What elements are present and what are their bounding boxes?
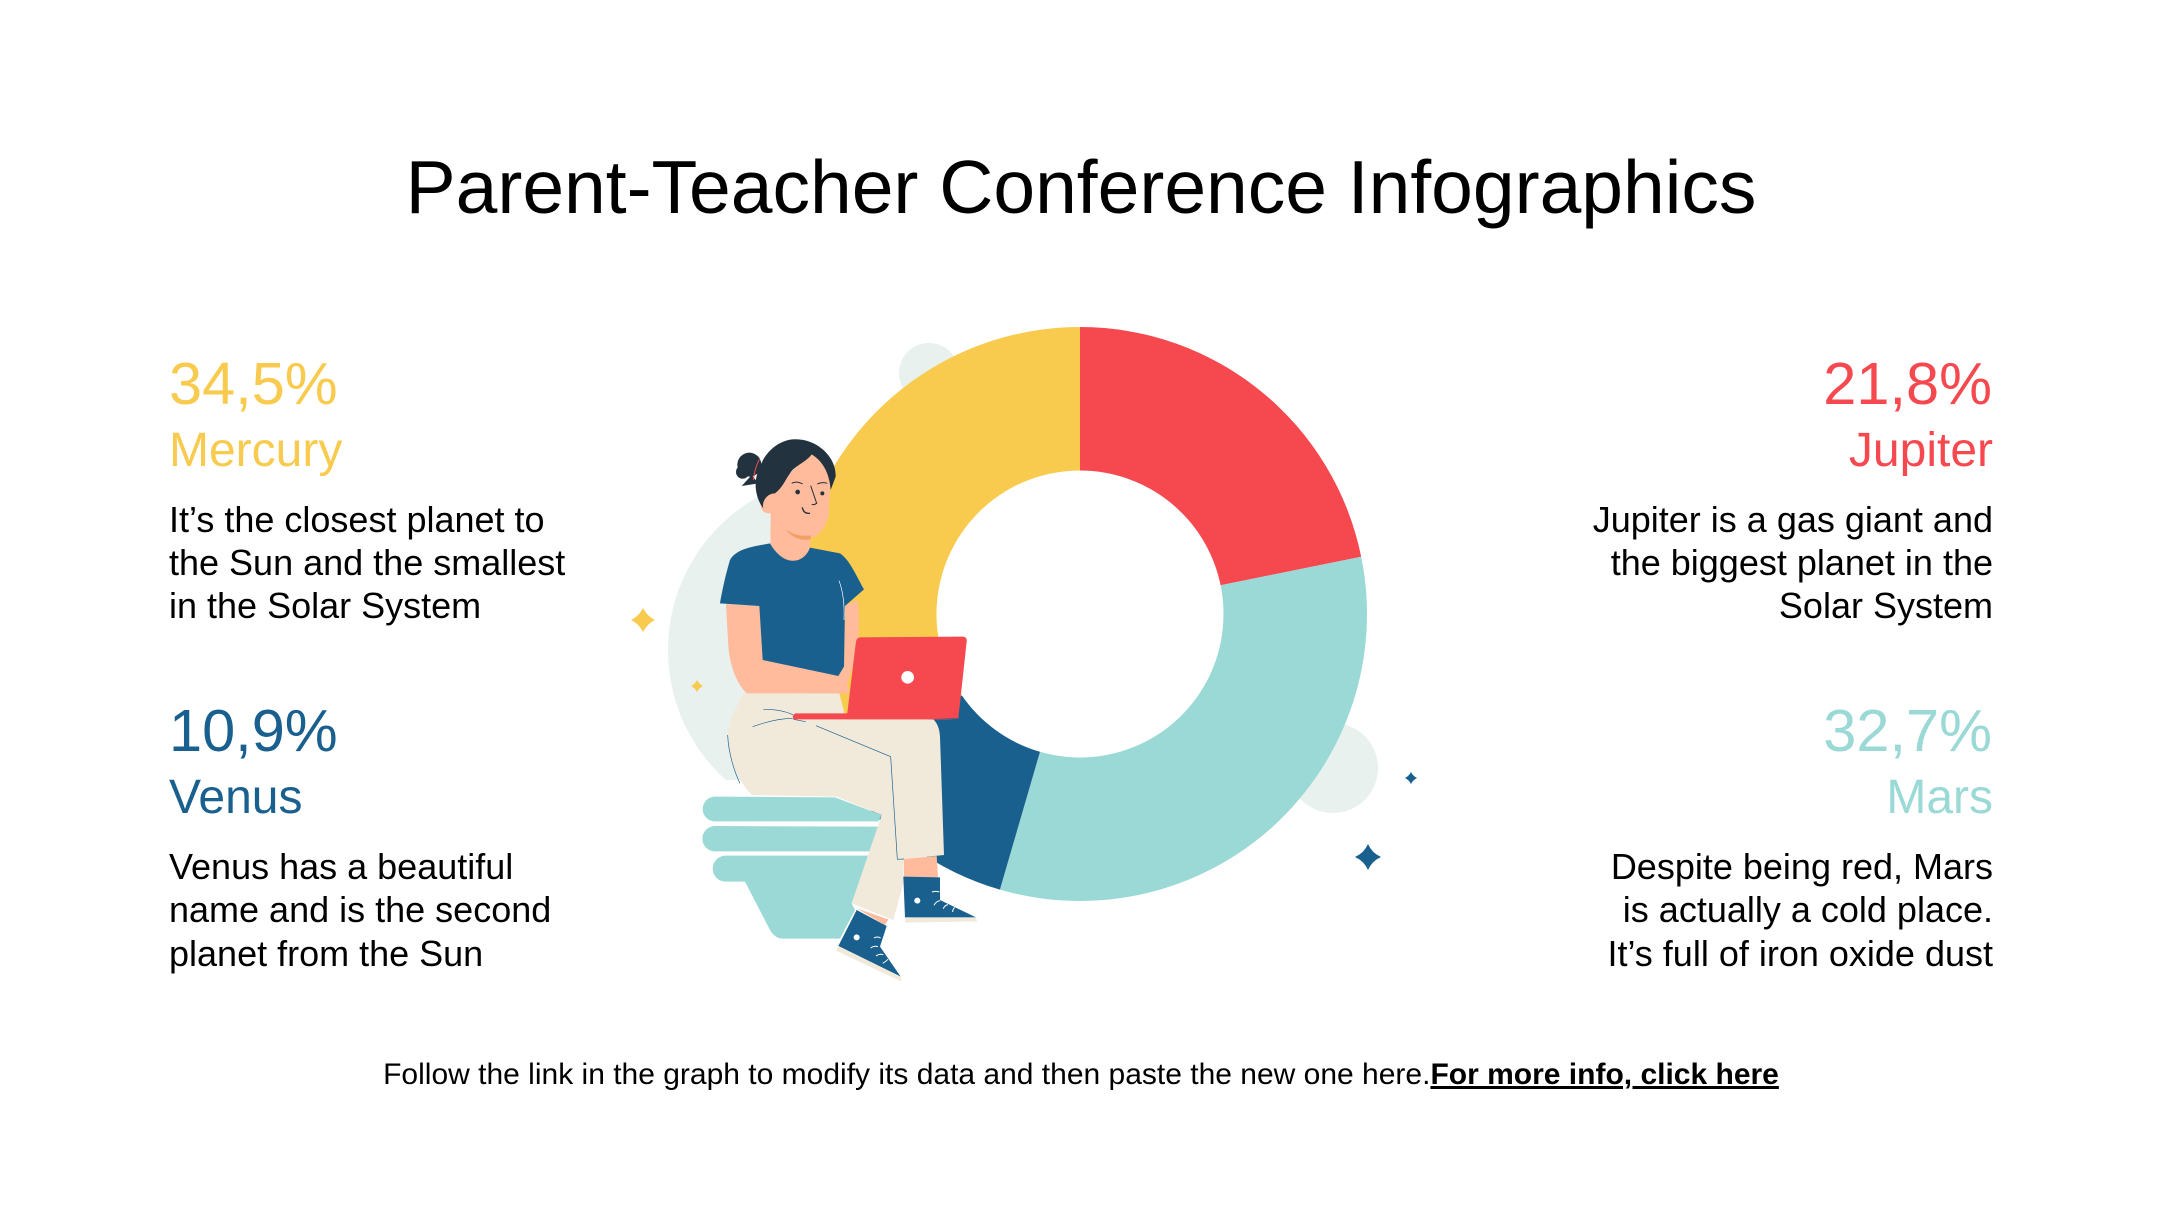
skin: neck and face	[763, 453, 831, 573]
pants	[728, 693, 944, 920]
panel: Mercury: in the Solar System	[169, 585, 481, 626]
illustration: seat	[702, 797, 882, 939]
panel: Jupiter: Solar System	[1779, 585, 1993, 626]
panel: Mars: 32,7%	[1823, 697, 1992, 764]
panel: Venus: Venus	[169, 771, 302, 824]
segment: Jupiter 21.8%	[1080, 327, 1361, 585]
ankles	[904, 856, 938, 877]
shoe: left	[838, 910, 901, 977]
panel: Mercury	[169, 350, 565, 626]
panel: Mars: is actually a cold place.	[1623, 889, 1993, 930]
footer note: Follow the link in the graph to modify its data and then paste the new one here.For more info, click here	[383, 1058, 1779, 1091]
panel: Mercury: It’s the closest planet to	[169, 499, 545, 540]
panel: Jupiter: Jupiter	[1849, 424, 1993, 477]
t-shirt	[720, 543, 864, 676]
icon: yellow sparkle small	[691, 680, 703, 692]
panel: Jupiter: 21,8%	[1823, 350, 1992, 417]
illustration: person with laptop	[720, 439, 977, 982]
segment: Mercury 34.5%	[793, 327, 1080, 777]
panel: Venus: 10,9%	[169, 697, 338, 764]
shoe: right	[903, 877, 976, 917]
laptop base	[793, 713, 957, 719]
panel: Jupiter: Jupiter is a gas giant and	[1593, 499, 1993, 540]
panel: Mars: Mars	[1886, 771, 1993, 824]
panel: Mercury: Mercury	[169, 424, 342, 477]
icon: blue sparkle large	[1355, 844, 1381, 870]
segment: Mars 32.7%	[1000, 557, 1367, 901]
panel: Mercury: 34,5%	[169, 350, 338, 417]
panel: Mars	[1607, 697, 1993, 974]
panel: Venus	[169, 697, 551, 974]
lower body	[728, 693, 977, 982]
panel: Venus: Venus has a beautiful	[169, 846, 513, 887]
arms	[840, 600, 859, 687]
panel: Venus: name and is the second	[169, 889, 551, 930]
panel: Jupiter: the biggest planet in the	[1611, 542, 1993, 583]
hair	[756, 439, 836, 508]
panel: Mars: It’s full of iron oxide dust	[1607, 933, 1993, 974]
title: Parent-Teacher Conference Infographics	[406, 145, 1756, 229]
segment: Venus 10.9%	[844, 695, 1040, 890]
icon: blue sparkle small	[1405, 772, 1417, 784]
laptop screen	[847, 637, 967, 718]
background blobs	[668, 343, 1378, 825]
panel: Mars: Despite being red, Mars	[1611, 846, 1993, 887]
panel: Mercury: the Sun and the smallest	[169, 542, 565, 583]
upper body	[720, 439, 967, 718]
donut chart	[793, 327, 1367, 901]
face details	[792, 482, 827, 513]
icon: yellow sparkle large	[631, 608, 655, 632]
panel: Venus: planet from the Sun	[169, 933, 483, 974]
panel: Jupiter	[1593, 350, 1993, 626]
